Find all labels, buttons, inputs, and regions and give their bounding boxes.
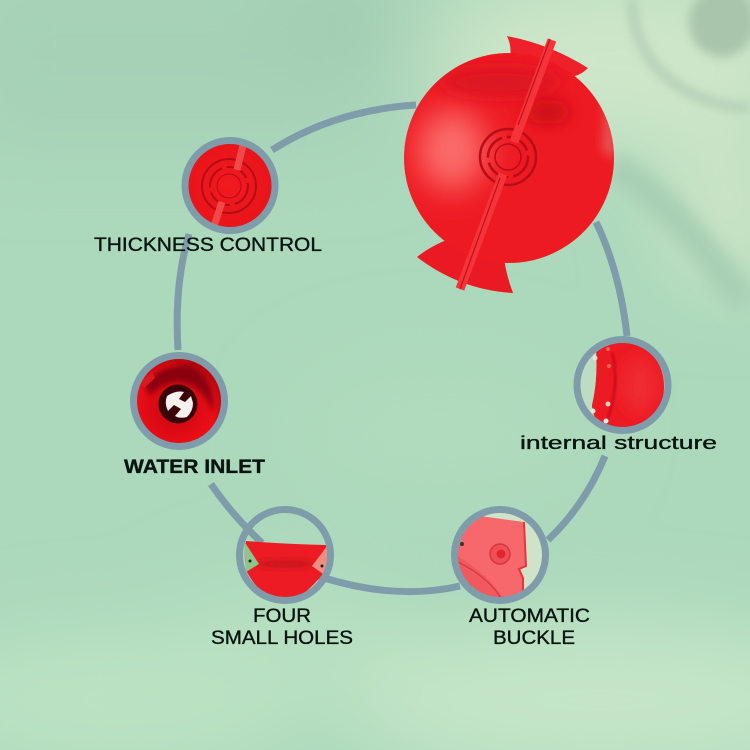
ball shading xyxy=(418,68,616,190)
icon: white slotted hub xyxy=(166,392,193,418)
ball body xyxy=(404,53,614,263)
photo xyxy=(188,144,272,232)
rib xyxy=(460,39,552,289)
top fin xyxy=(507,36,588,76)
main product: red ball xyxy=(404,36,616,293)
frame xyxy=(134,356,224,446)
frame xyxy=(185,140,275,230)
callout: automatic buckle xyxy=(450,510,590,649)
callout: internal structure xyxy=(520,340,717,453)
photo xyxy=(244,541,328,600)
callout: thickness control xyxy=(94,140,322,256)
photo xyxy=(136,358,222,444)
label: WATER INLET xyxy=(124,457,265,478)
label: THICKNESS CONTROL xyxy=(94,235,322,256)
frame xyxy=(577,340,668,430)
frame xyxy=(454,510,546,600)
callout: water inlet xyxy=(124,356,265,478)
callout: four small holes xyxy=(211,510,353,649)
label: FOUR xyxy=(253,606,311,627)
bottom fin xyxy=(417,241,513,293)
callout: automatic buckle: BUCKLE xyxy=(493,628,575,649)
label: AUTOMATIC xyxy=(469,606,590,627)
frame xyxy=(240,510,330,600)
photo xyxy=(578,341,666,429)
callout: four small holes: SMALL HOLES xyxy=(211,628,353,649)
connecting ring xyxy=(177,105,627,592)
centre rings xyxy=(480,129,536,185)
label: internal structure xyxy=(520,433,717,453)
photo xyxy=(458,513,542,597)
